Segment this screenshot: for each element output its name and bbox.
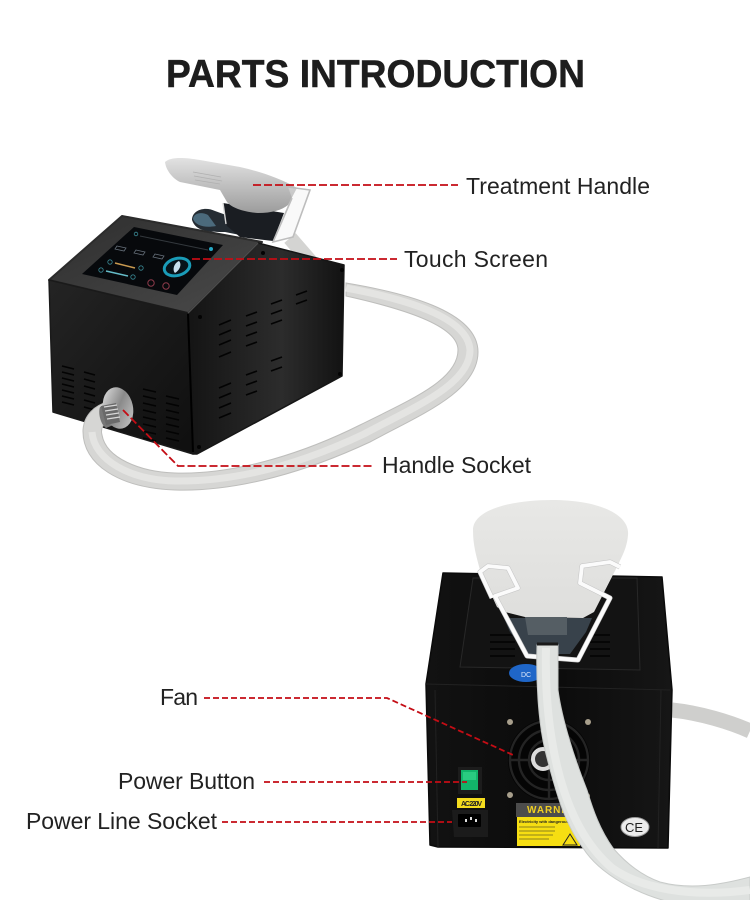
warning label [516, 803, 582, 846]
top face [49, 216, 262, 313]
leader: handle socket [123, 410, 373, 466]
label: power line socket: Power Line Socket [26, 808, 218, 834]
leader: power line socket [222, 821, 452, 823]
handle socket knob [99, 384, 137, 432]
leader: power button [264, 781, 467, 783]
label: handle socket: Handle Socket [382, 452, 532, 478]
label: fan: Fan [160, 684, 198, 710]
fan [507, 719, 591, 801]
screws [197, 251, 344, 449]
blue sticker [509, 664, 543, 682]
top vents [490, 635, 610, 656]
front vents [62, 366, 179, 441]
warning label: WARNING [527, 805, 581, 816]
front-view machine [49, 158, 478, 490]
machine body [49, 216, 344, 454]
touch screen [82, 227, 223, 295]
top plate [460, 578, 640, 670]
rear hose right [672, 710, 750, 731]
label: touch screen: Touch Screen [404, 246, 548, 272]
CE mark: CE [625, 820, 643, 835]
blue sticker: DC [521, 672, 531, 679]
leader: treatment handle [253, 184, 458, 186]
rear treatment handle [473, 500, 628, 660]
front hose [537, 644, 750, 900]
side vents [219, 291, 307, 418]
warning label: Electricity with dangerous! [519, 819, 570, 824]
front face [49, 280, 193, 454]
rear-view machine [426, 500, 750, 900]
CE mark [621, 818, 649, 836]
power button [458, 767, 482, 794]
side face [188, 243, 344, 454]
voltage label [457, 798, 485, 808]
leader: fan [204, 698, 513, 755]
treatment handle [165, 158, 310, 242]
hose behind handle [290, 238, 335, 290]
voltage label: AC 220V [461, 801, 482, 808]
label: treatment handle: Treatment Handle [466, 173, 650, 199]
label: power button: Power Button [118, 768, 255, 794]
leader: touch screen [192, 258, 397, 260]
hose [83, 283, 478, 490]
rear body [426, 573, 672, 848]
power line socket [452, 810, 488, 837]
title: PARTS INTRODUCTION [166, 53, 585, 96]
